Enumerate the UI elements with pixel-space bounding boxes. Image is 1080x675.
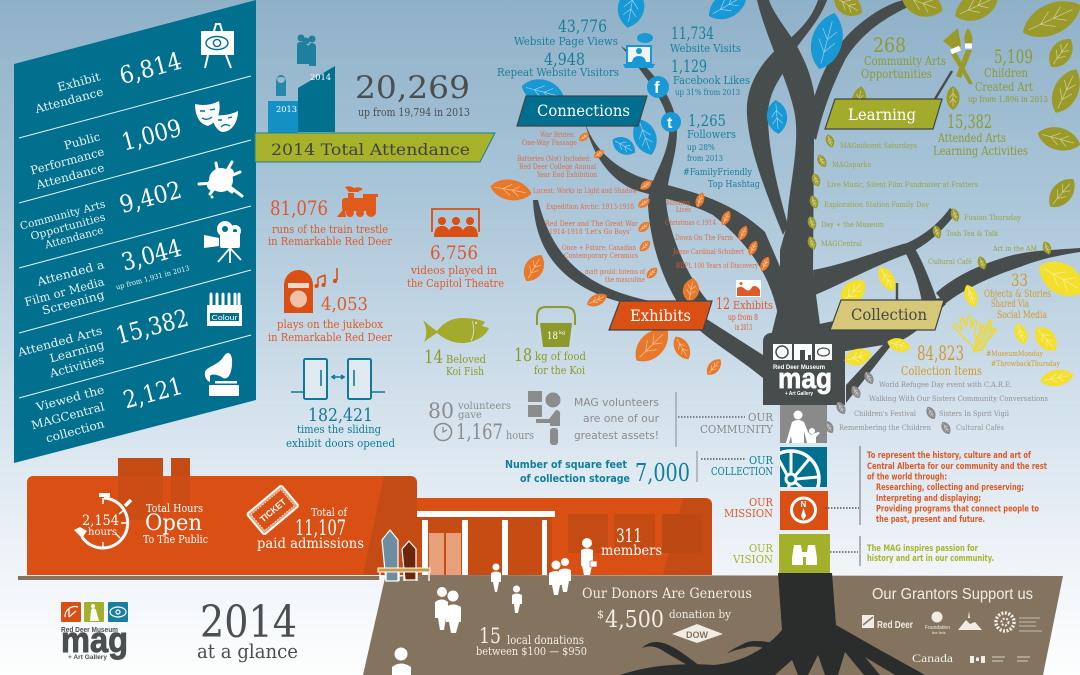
branch: upper left twig — [785, 0, 827, 50]
icon: person with briefcase — [581, 538, 597, 575]
exhibits list: One-Way Passage — [522, 138, 577, 147]
icon: film camera — [204, 221, 241, 263]
icon: twitter — [661, 112, 681, 132]
film screening row: Screening — [40, 287, 106, 317]
community arts row: Attendance — [43, 224, 105, 252]
learning list: Tosh Tea & Talk — [946, 229, 998, 238]
mission text: Researching, collecting and preserving; — [876, 483, 1024, 493]
icon: attendance buildings: 2014 — [310, 73, 331, 82]
icon: bucket: kg — [559, 330, 566, 336]
icon: gloves — [953, 316, 996, 351]
train statistic: 81,076 — [270, 196, 328, 220]
icon: clock — [434, 424, 452, 440]
icon: colour crayon box — [207, 293, 242, 326]
icon block: mission compass: N — [800, 500, 806, 509]
our vision label — [732, 542, 774, 566]
our community label: COMMUNITY — [700, 423, 774, 436]
train statistic: runs of the train trestle — [272, 222, 388, 236]
tree logo: Red Deer Museum — [773, 364, 825, 371]
volunteers statistic: 80 — [428, 399, 454, 423]
connections statistics: 11,734 — [671, 24, 714, 44]
icon: bucket — [537, 307, 575, 347]
community arts row: Community Arts — [19, 198, 107, 233]
brand logo — [61, 602, 128, 661]
volunteers statistic — [428, 391, 560, 445]
exhibits list: Down On The Farm — [675, 233, 733, 242]
total attendance figure — [355, 70, 470, 119]
stopwatch and hours open: To The Public — [143, 533, 208, 546]
exhibits list: Batteries (Not) Included: — [517, 154, 591, 163]
brand logo: mag — [61, 619, 128, 660]
exhibits list: War Brides: — [540, 130, 575, 139]
panel: attendance figures — [14, 0, 256, 463]
icon: ticket: TICKET — [258, 496, 288, 524]
exhibit attendance row: Exhibit — [56, 69, 102, 94]
exhibits count: 12 — [716, 294, 730, 313]
mission text: Interpreting and displaying; — [876, 494, 981, 504]
exhibits list: Red Deer and The Great War — [545, 219, 638, 228]
exhibits list: Lives — [676, 205, 691, 214]
people on the plaza — [392, 558, 571, 675]
donors — [476, 586, 752, 658]
learning list: MAGCentral — [821, 239, 863, 248]
logo: City of Red Deer — [862, 615, 913, 631]
icon: theatre masks — [195, 101, 238, 132]
exhibits count — [716, 280, 773, 333]
members: 311 — [616, 525, 642, 547]
icon: twitter: t — [667, 115, 673, 132]
learning statistics: Created Art — [975, 80, 1033, 94]
donors: Our Donors Are Generous — [582, 586, 752, 602]
our community label: OUR — [748, 411, 774, 424]
tree logo: + Art Gallery — [785, 391, 813, 397]
collection statistics: Social Media — [997, 310, 1047, 321]
stopwatch and hours open — [74, 493, 208, 548]
public performance row: 1,009 — [118, 114, 185, 157]
vision text — [830, 536, 994, 566]
collection statistics — [901, 271, 1061, 378]
branch: collection lower — [815, 298, 946, 403]
ticket and paid admissions: paid admissions — [257, 536, 364, 552]
learning statistics: 5,109 — [994, 46, 1033, 68]
branch: connections — [585, 122, 790, 315]
collection statistics: 33 — [1011, 271, 1028, 291]
connections statistics: Facebook Likes — [673, 74, 750, 87]
connections statistics: 1,265 — [688, 111, 726, 130]
exhibits list: Red Deer College Annual — [519, 162, 597, 171]
logo: Canadian Heritage — [970, 656, 1030, 663]
exhibits count: up from 8 — [728, 313, 758, 323]
banner: 2014 total attendance — [255, 133, 495, 162]
bucket statistic — [514, 307, 586, 377]
icon: stopwatch — [74, 493, 131, 548]
sign: learning: Learning — [848, 105, 916, 124]
community list: Walking With Our Sisters Community Conversations — [869, 394, 1048, 403]
doors statistic: 182,421 — [308, 405, 373, 426]
community arts row: Opportunities — [29, 211, 107, 243]
MAGCentral row: Viewed the — [33, 382, 106, 414]
icon block: community — [780, 405, 827, 443]
community list: Children's Festival — [854, 409, 917, 418]
members — [581, 525, 662, 575]
grantors — [862, 586, 1042, 665]
exhibits list: matt gould: totems of — [585, 267, 646, 276]
leaves: gray — [822, 370, 953, 436]
collection statistics: #MuseumMonday — [986, 349, 1044, 358]
title: 2014 at a glance: 2014 — [200, 597, 297, 648]
ticket and paid admissions: Total of — [311, 506, 348, 519]
tree logo: mag — [778, 363, 832, 395]
members: members — [601, 543, 662, 559]
stopwatch and hours open: Open — [145, 511, 202, 536]
learning list: Live Music, Silent Film Fundraiser at Fratters — [827, 180, 978, 189]
logo block — [763, 333, 845, 405]
learning statistics: Attended Arts — [937, 131, 1006, 145]
icon: bucket: 18 — [547, 331, 558, 342]
total attendance figure: 20,269 — [355, 70, 470, 106]
exhibits list: Lucent: Works in Light and Shadow — [533, 186, 638, 195]
sculpture and bench — [378, 530, 430, 581]
connections statistics: from 2013 — [687, 154, 723, 164]
title: 2014 at a glance: at a glance — [197, 639, 298, 663]
exhibits list: Missing — [666, 198, 690, 207]
learning list — [821, 141, 1037, 266]
icon: volunteer with boxes — [528, 391, 560, 445]
logo: foundation for the arts — [925, 612, 950, 635]
train statistic — [268, 186, 392, 248]
public performance row — [29, 114, 185, 192]
exhibits list: Joane Cardinal-Schubert — [672, 247, 744, 256]
learning statistics — [861, 33, 1048, 158]
icon block: collection wheel — [780, 447, 827, 487]
community list — [839, 380, 1048, 432]
bucket statistic: 18 — [514, 345, 532, 366]
learning list: Cultural Café — [928, 257, 972, 266]
sign: exhibits: Exhibits — [630, 306, 691, 325]
stopwatch and hours open: Total Hours — [146, 502, 203, 515]
exhibits count: in 2013 — [735, 323, 752, 333]
banner: 2014 total attendance: 2014 Total Attendance — [271, 140, 470, 159]
logo: City of Red Deer: Red Deer — [877, 620, 913, 631]
branch: collection strut — [904, 247, 937, 302]
film screening row — [23, 234, 191, 317]
doors statistic — [286, 359, 396, 450]
icon: laptop — [623, 33, 655, 68]
icon: theatre audience — [432, 209, 479, 237]
learning list: Day + the Museum — [821, 220, 884, 229]
connections statistics: Repeat Website Visitors — [497, 66, 619, 79]
learning statistics: Opportunities — [861, 67, 932, 81]
community list: Cultural Cafés — [956, 423, 1004, 432]
theatre statistic: 6,756 — [430, 242, 478, 264]
community arts row — [19, 176, 185, 252]
icon: paint splat — [199, 162, 242, 198]
sign: collection: Collection — [851, 305, 927, 324]
exhibits count: Exhibits — [733, 299, 773, 312]
film screening row: Film or Media — [23, 274, 106, 309]
collection storage statistic: Number of square feet — [505, 458, 627, 471]
our community label — [676, 392, 774, 447]
icon: paintbrushes — [943, 28, 973, 84]
stopwatch and hours open: hours — [88, 526, 117, 538]
koi statistic: Koi Fish — [446, 365, 484, 378]
theatre statistic — [407, 209, 504, 290]
arts learning row: Activities — [47, 352, 106, 381]
icon: sliding doors — [291, 359, 385, 399]
arts learning row: 15,382 — [113, 304, 192, 350]
trunk — [757, 0, 822, 340]
MAGCentral row — [30, 372, 186, 445]
collection statistics: Objects & Stories — [984, 289, 1051, 300]
connections statistics: up 31% from 2013 — [675, 88, 740, 97]
donors: donation by — [669, 608, 732, 621]
learning list: MAGsparks — [832, 160, 871, 169]
leaves: orange — [489, 131, 772, 378]
learning statistics: Children — [984, 66, 1028, 80]
our mission label — [724, 496, 774, 520]
learning statistics: Community Arts — [864, 54, 946, 68]
koi statistic — [423, 318, 489, 378]
brand logo: + Art Gallery — [68, 655, 108, 661]
branch: collection right — [936, 248, 1080, 304]
logo: community culture — [996, 613, 1042, 631]
ticket and paid admissions — [247, 485, 364, 552]
public performance row: Attendance — [34, 160, 106, 192]
building illustration — [18, 458, 712, 580]
volunteers statistic: hours — [506, 429, 534, 442]
jukebox statistic: in Remarkable Red Deer — [268, 330, 392, 344]
arts learning row — [15, 304, 192, 381]
Dow logo: DOW — [686, 630, 708, 640]
train statistic: in Remarkable Red Deer — [268, 234, 392, 248]
collection storage statistic — [505, 458, 690, 487]
icon: facebook: f — [654, 78, 660, 97]
community arts row: 9,402 — [116, 176, 185, 219]
total attendance figure: up from 19,794 in 2013 — [358, 106, 470, 119]
collection statistics: Collection Items — [901, 364, 982, 378]
mission text: Providing programs that connect people to — [876, 504, 1039, 514]
icon: attendance buildings — [268, 34, 335, 133]
vision text: history and art in our community. — [867, 554, 994, 564]
title: 2014 at a glance — [197, 597, 298, 663]
exhibits list: Christmas c.1914 — [665, 218, 716, 227]
tree logo — [773, 344, 832, 397]
leaves: olive — [806, 0, 1080, 271]
exhibits list: RDPL 100 Years of Discovery — [676, 261, 759, 270]
learning list: Exploration Station Family Day — [824, 200, 930, 209]
brand logo: Red Deer Museum — [61, 627, 118, 634]
koi statistic: Beloved — [446, 353, 486, 366]
exhibits list: Contemporary Ceramics — [564, 251, 638, 260]
branch: learning — [806, 0, 925, 140]
public performance row: Performance — [29, 144, 106, 178]
bucket statistic: kg of food — [535, 350, 586, 363]
branch: left strand — [747, 42, 797, 235]
film screening row: Attended a — [34, 257, 106, 289]
volunteers statistic: 1,167 — [456, 420, 503, 444]
branch: exhibits left — [533, 200, 650, 302]
icon: facebook — [647, 76, 669, 98]
our vision label: OUR — [749, 542, 774, 555]
logo: foundation for the arts: the Arts — [932, 630, 946, 635]
jukebox statistic: plays on the jukebox — [277, 317, 383, 331]
connections statistics — [497, 17, 760, 190]
Dow logo — [672, 624, 723, 643]
MAGCentral row: MAGCentral — [30, 399, 106, 432]
donors: 4,500 — [605, 607, 664, 633]
koi statistic: 14 — [424, 347, 443, 368]
volunteers message: are one of our — [583, 412, 659, 425]
collection storage statistic: of collection storage — [520, 472, 630, 485]
theatre statistic: the Capitol Theatre — [407, 276, 504, 290]
volunteers statistic: gave — [458, 410, 482, 421]
donors: between $100 — $950 — [476, 645, 587, 658]
total attendance block — [255, 34, 495, 162]
collection statistics: 84,823 — [917, 341, 964, 365]
volunteers statistic: volunteers — [457, 401, 511, 412]
exhibit attendance row: 6,814 — [116, 47, 185, 90]
our collection label: COLLECTION — [711, 465, 773, 478]
exhibits list: Expedition Arctic: 1913-1918 — [546, 202, 634, 211]
mission text — [825, 446, 1047, 525]
icon: easel with eye — [201, 24, 234, 68]
sign: collection — [830, 300, 944, 330]
bucket statistic: for the Koi — [534, 364, 585, 377]
tree trunk and roots — [620, 573, 925, 675]
learning list: Fusion Thursday — [964, 213, 1022, 222]
icon: train — [337, 186, 378, 217]
doors statistic: times the sliding — [297, 422, 382, 436]
public performance row: Public — [62, 129, 102, 152]
connections statistics: Website Page Views — [514, 35, 618, 48]
MAGCentral row: 2,121 — [120, 372, 186, 414]
learning statistics: Learning Activities — [933, 144, 1028, 158]
exhibit attendance row — [33, 47, 185, 116]
exhibits list: 1914-1918 'Let's Go Boys' — [549, 227, 631, 236]
connections statistics: up 28% — [687, 143, 715, 153]
volunteers message — [574, 396, 659, 442]
icon block: mission compass — [780, 491, 828, 530]
film screening row: up from 1,931 in 2013 — [115, 264, 191, 292]
volunteers message: greatest assets! — [574, 429, 659, 442]
leaves: yellow — [835, 253, 1080, 389]
icon block: vision binoculars — [779, 534, 830, 573]
collection storage statistic: 7,000 — [635, 459, 690, 487]
sign: connections: Connections — [537, 101, 630, 120]
MAGCentral row: collection — [44, 416, 106, 445]
branch: web and exhibits — [621, 46, 763, 378]
leaves: blue — [519, 0, 849, 160]
icon: gramophone — [205, 353, 239, 396]
exhibits list: Once + Future: Canadian — [562, 243, 636, 252]
doors statistic: exhibit doors opened — [286, 436, 396, 450]
icon: jukebox — [284, 268, 337, 313]
exhibits list: Year End Exhibition — [536, 170, 597, 179]
sign: exhibits — [609, 301, 712, 330]
ticket and paid admissions: 11,107 — [295, 516, 346, 540]
logo: mountain — [958, 611, 982, 630]
community list: World Refugee Day event with C.A.R.E. — [879, 380, 1012, 389]
exhibits list — [517, 130, 759, 284]
connections statistics: Website Visits — [670, 42, 741, 55]
exhibits list: the masculine — [605, 275, 645, 284]
donors: local donations — [507, 633, 584, 647]
our collection label — [697, 451, 774, 482]
collection statistics: Shared Via — [991, 299, 1029, 310]
tree — [533, 0, 1080, 405]
jukebox statistic — [268, 268, 392, 344]
film screening row: 3,044 — [118, 234, 185, 277]
vision text: The MAG inspires passion for — [867, 544, 979, 554]
jukebox statistic: 4,053 — [321, 294, 368, 315]
grantors: Our Grantors Support us — [872, 586, 1033, 603]
connections statistics: Top Hashtag — [708, 179, 760, 190]
connections statistics: Followers — [687, 128, 736, 141]
volunteers message: MAG volunteers — [574, 396, 659, 409]
our collection label: OUR — [749, 454, 774, 467]
connections statistics: 1,129 — [671, 57, 707, 77]
our mission label: MISSION — [724, 507, 773, 520]
exhibit attendance row: Attendance — [33, 84, 105, 116]
theatre statistic: videos played in — [410, 263, 498, 277]
community list: Sisters In Spirit Vigil — [939, 409, 1010, 418]
logo: Canada: Canada — [912, 651, 954, 665]
stopwatch and hours open: 2,154 — [82, 513, 119, 529]
mission text: of the world through: — [867, 472, 947, 482]
sign: learning — [825, 99, 942, 129]
arts learning row: Learning — [48, 337, 106, 365]
sign: connections — [517, 96, 647, 126]
icon: koi fish — [423, 318, 489, 343]
connections statistics: 43,776 — [558, 17, 607, 37]
learning statistics: 268 — [873, 33, 906, 57]
our vision label: VISION — [732, 553, 773, 566]
icon: colour crayon box: Colour — [212, 315, 238, 322]
ground — [363, 575, 1063, 675]
collection statistics: #ThrowbackThursday — [991, 359, 1061, 368]
community list: Remembering the Children — [839, 423, 931, 432]
learning list: Art in the AM — [992, 244, 1037, 253]
learning statistics: up from 1,896 in 2013 — [968, 95, 1048, 105]
mission text: To represent the history, culture and art of — [867, 451, 1031, 461]
icon: attendance buildings: 2013 — [276, 105, 297, 114]
branch: collection upper — [813, 208, 956, 295]
logo: foundation for the arts: Foundation — [925, 625, 950, 631]
donors: $ — [597, 608, 604, 621]
learning statistics: 15,382 — [947, 111, 992, 133]
donors: 15 — [479, 624, 501, 648]
arts learning row: Attended Arts — [15, 323, 104, 360]
connections statistics: #FamilyFriendly — [683, 167, 753, 178]
learning list: MAGnificent Saturdays — [840, 141, 917, 150]
connections statistics: 4,948 — [544, 50, 585, 70]
mission text: the past, present and future. — [876, 515, 985, 525]
our mission label: OUR — [749, 496, 774, 509]
